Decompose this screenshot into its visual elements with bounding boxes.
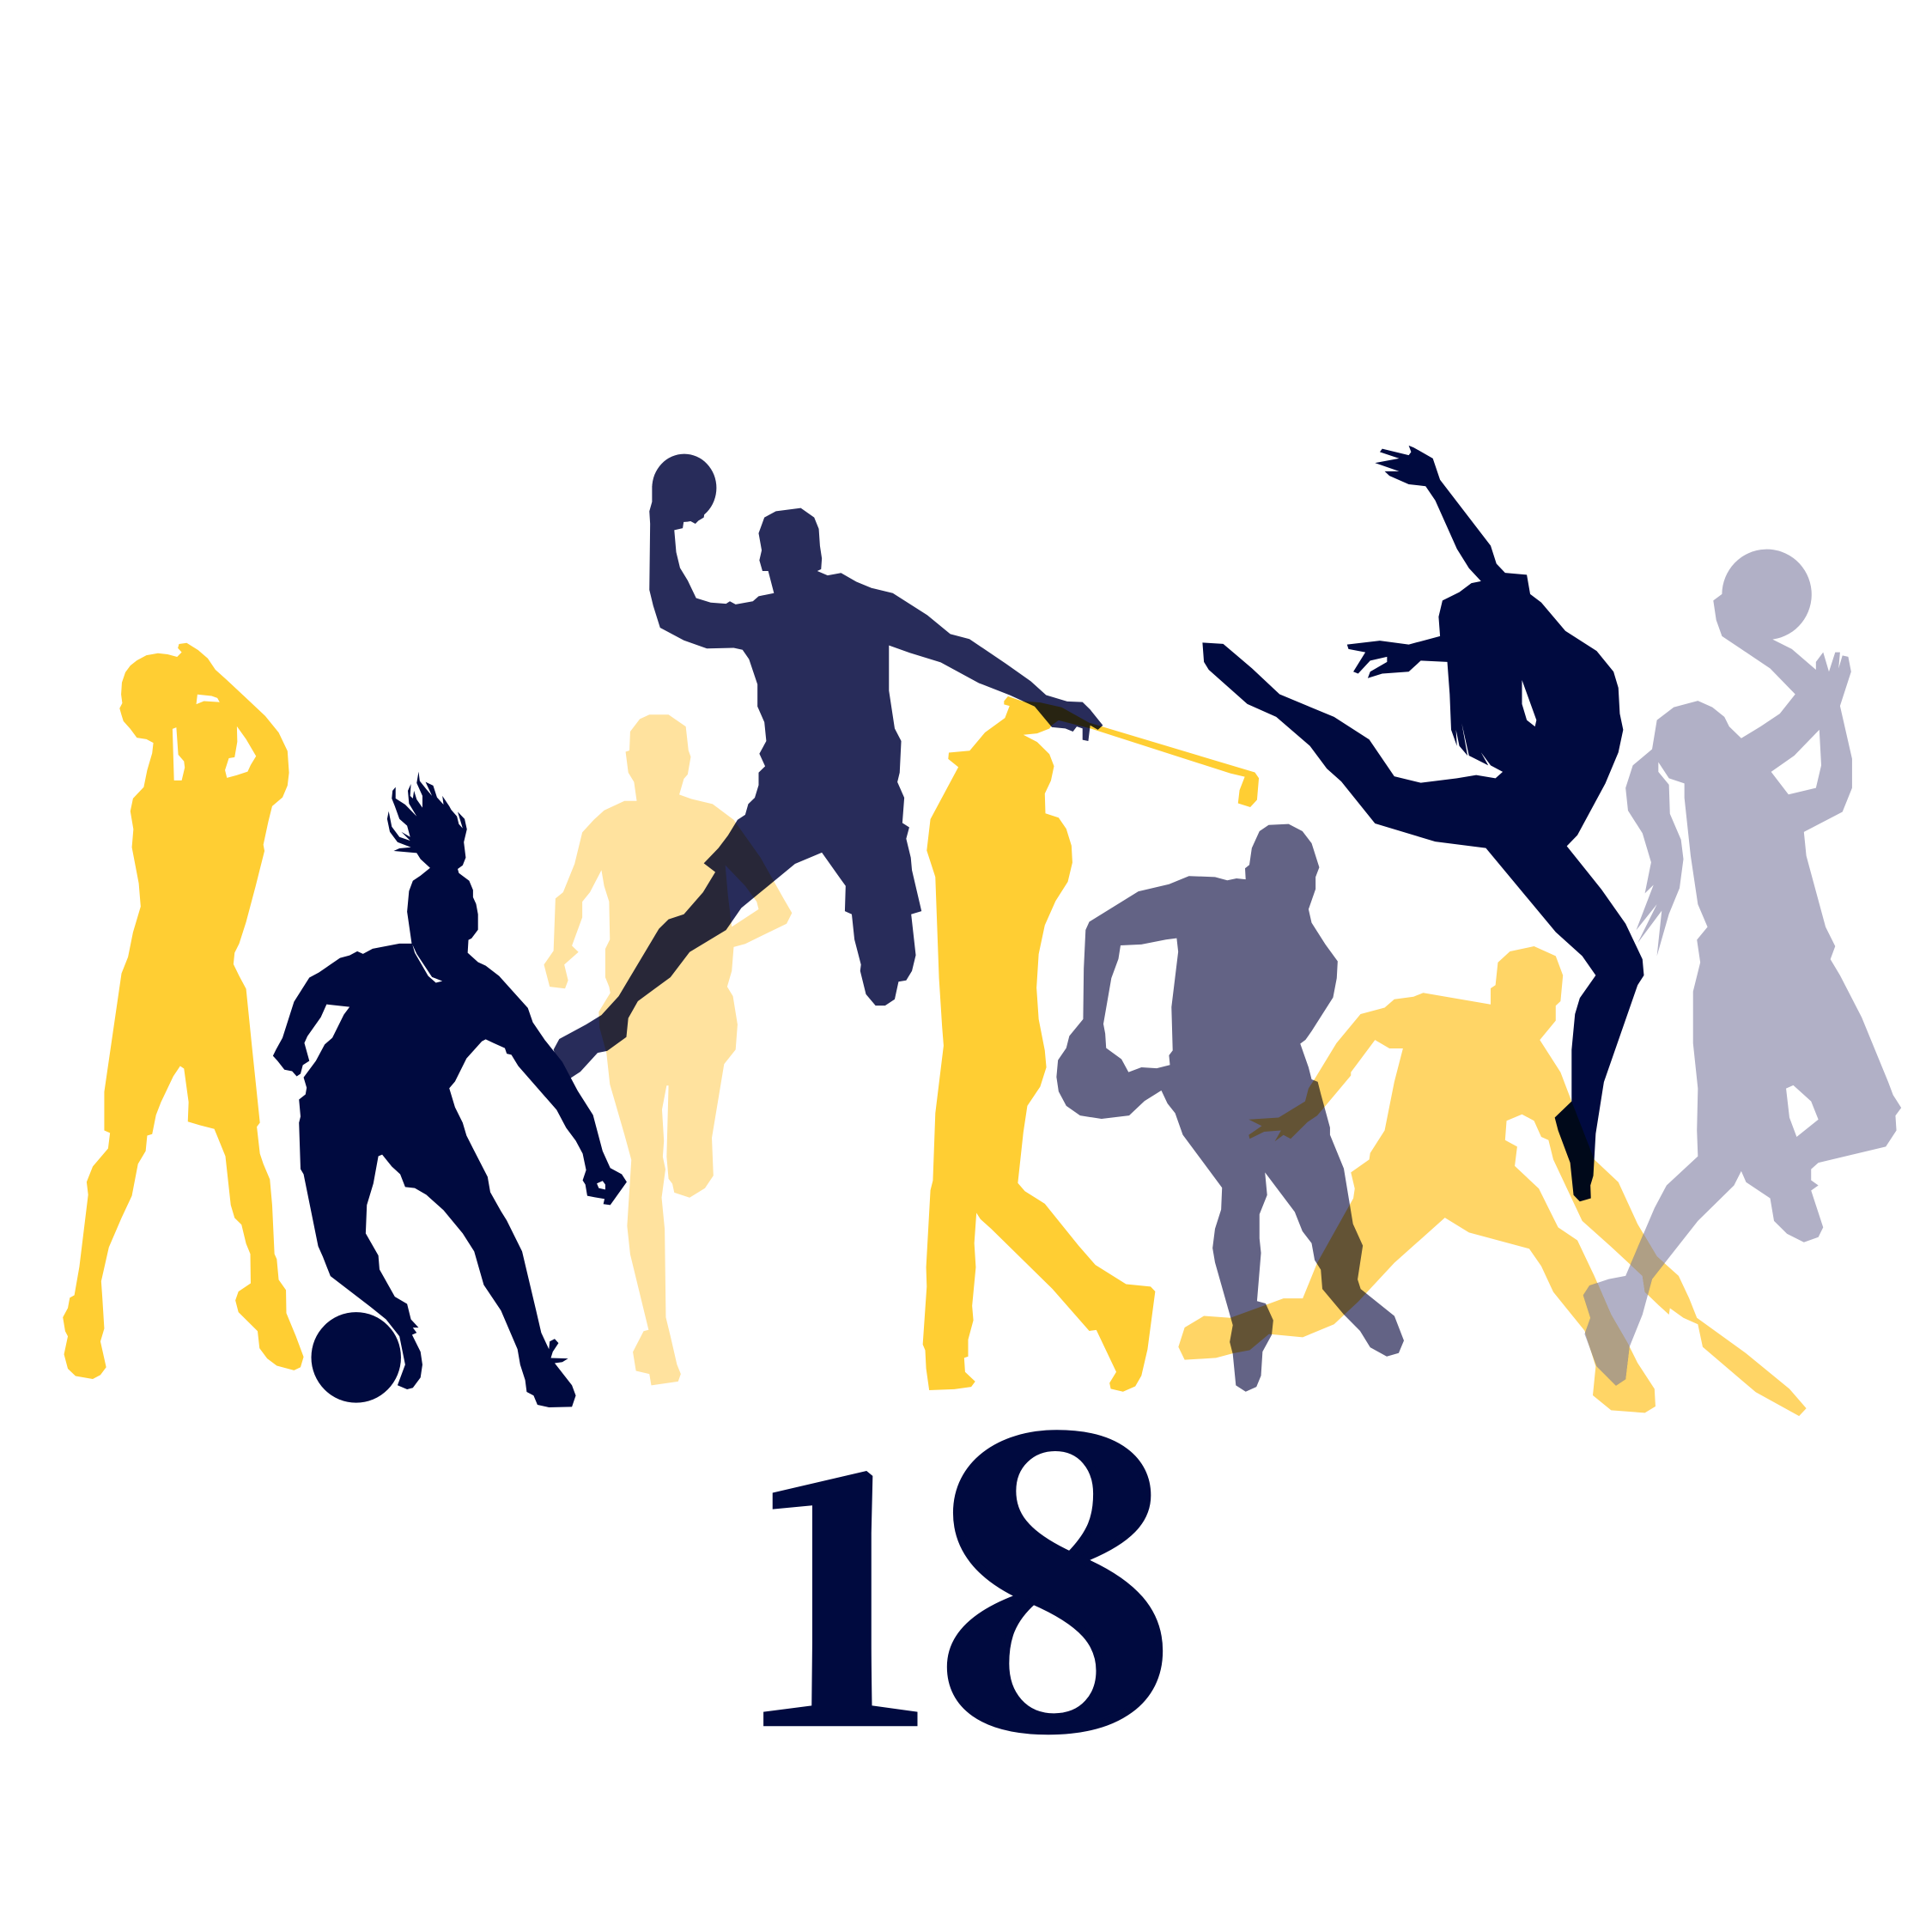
icon: soccer ball [312,1312,401,1403]
number 18 [737,1269,1180,1838]
figure: soccer player with ball [273,772,627,1407]
overlap: girl and crouching player [1583,1234,1664,1386]
figure: basketball girl [1583,550,1901,1386]
number 18: 8 [930,1269,1180,1838]
figure: golfer with club [923,696,1259,1392]
number 18: 1 [737,1329,942,1823]
figure: man carrying ball [1056,824,1404,1392]
figure: handball player jumping [554,454,1103,1079]
soccer player body [273,772,627,1407]
figure: yellow player holding ball overhead [63,643,304,1379]
figure: pale yellow running player [544,714,792,1385]
figure: leaping dancer [1202,446,1643,1201]
figure: crouching yellow player [1178,946,1807,1416]
